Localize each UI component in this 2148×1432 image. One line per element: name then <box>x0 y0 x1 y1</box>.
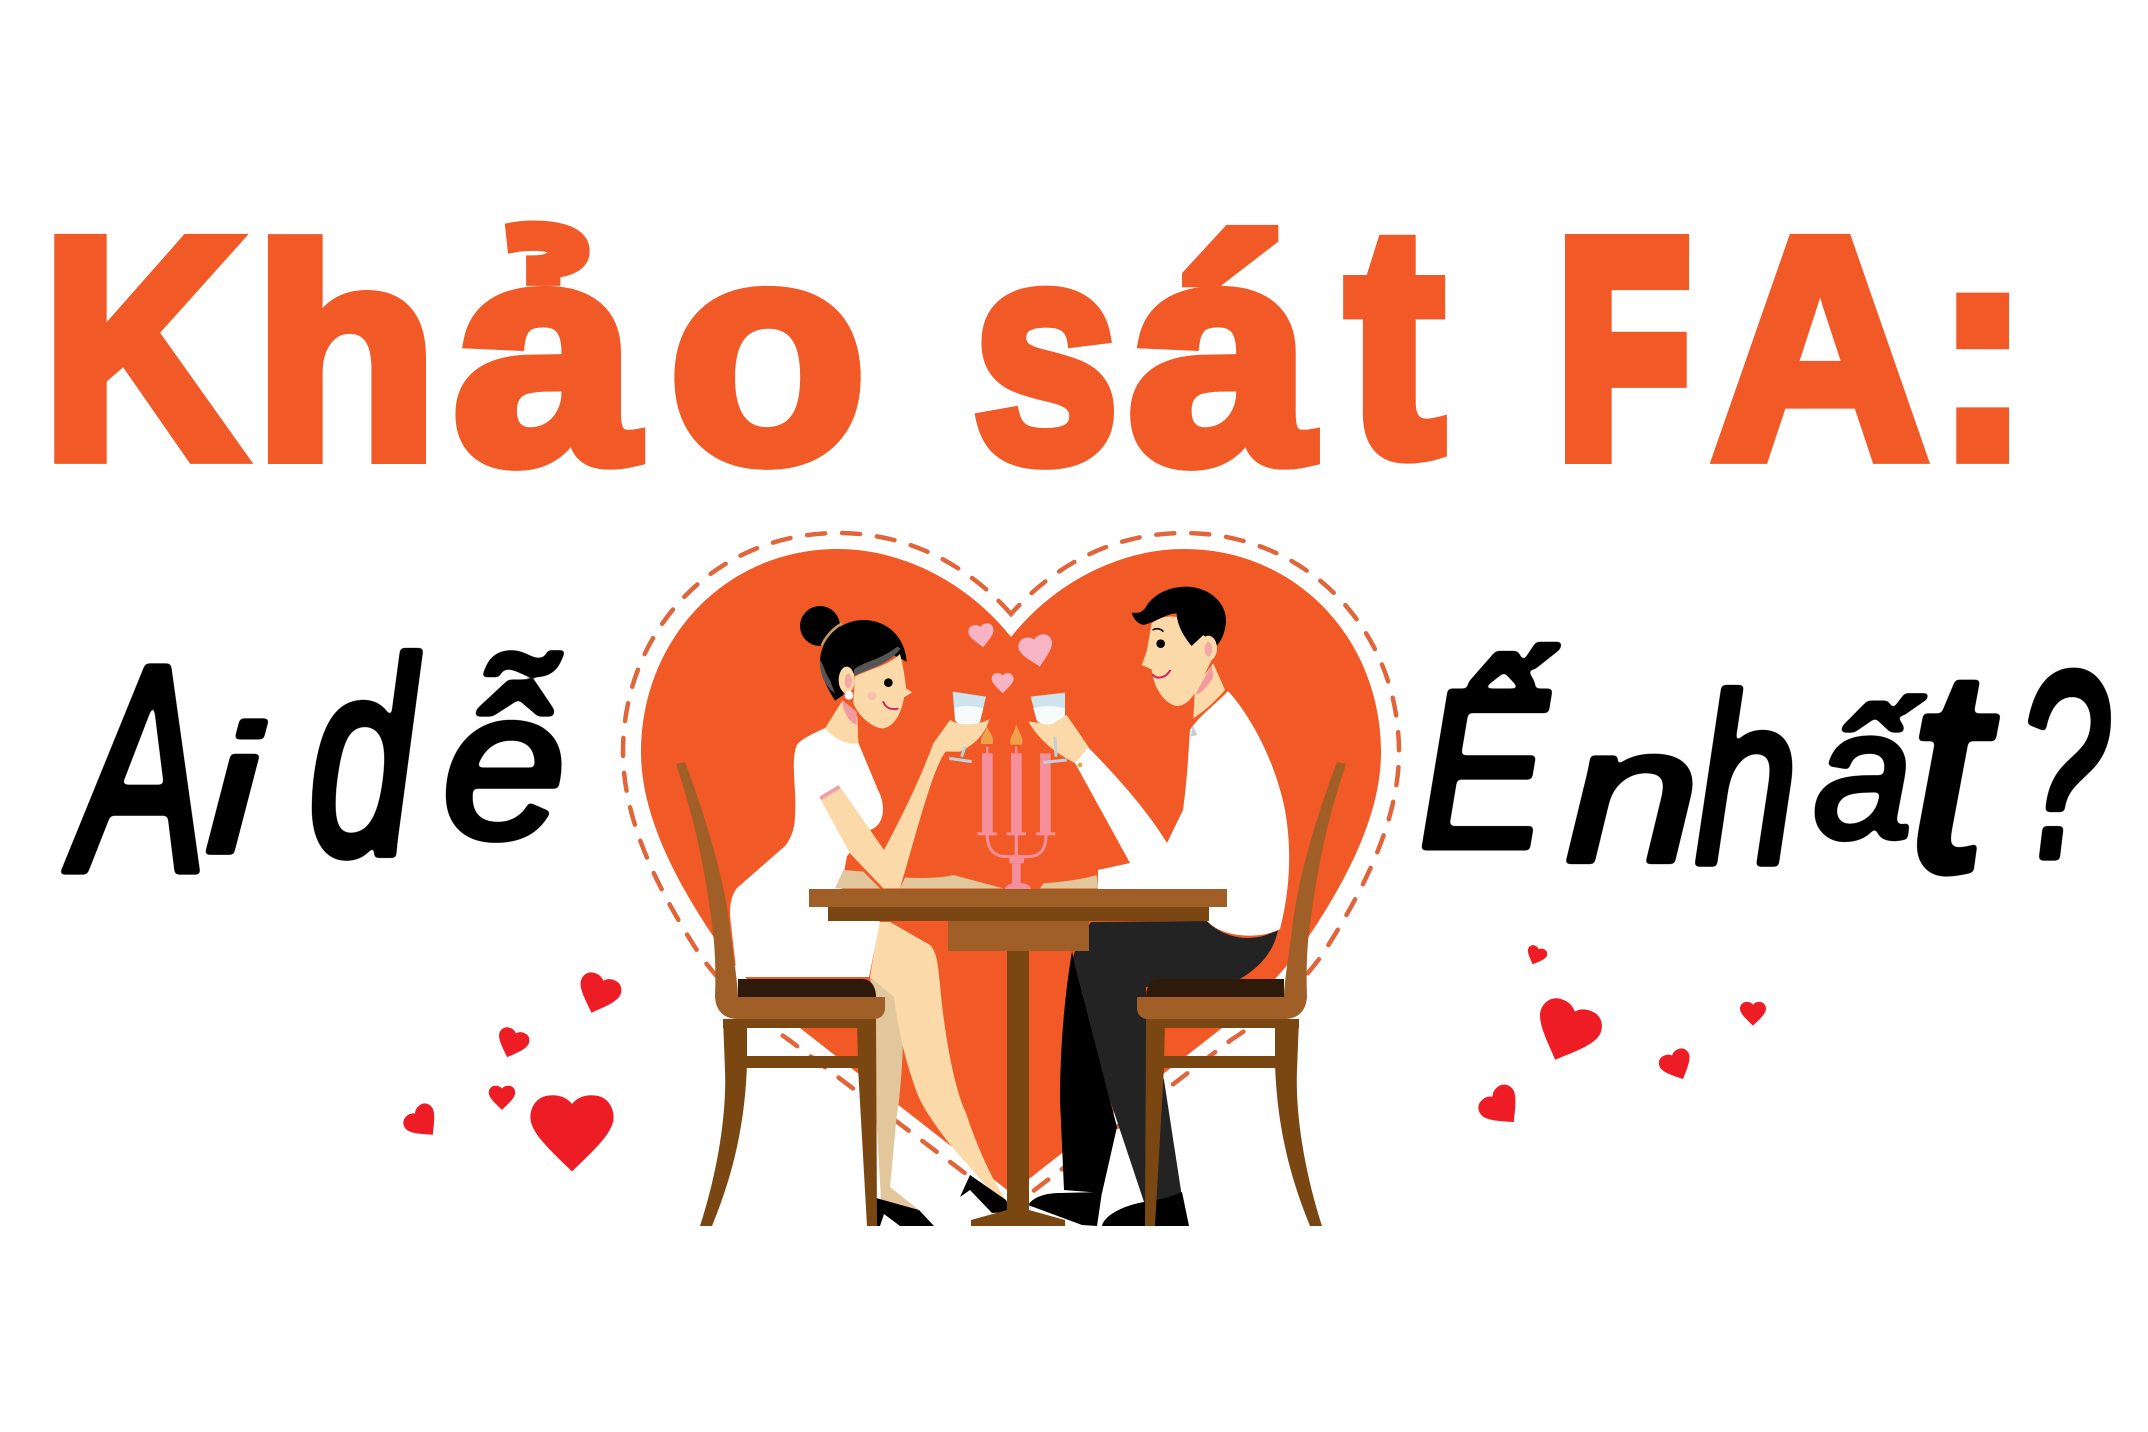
man shirt <box>1075 691 1289 936</box>
subtitle right: Ế nhất?: ? <box>2018 618 2109 912</box>
subtitle right: Ế nhất?: h <box>1695 646 1798 914</box>
title: Khảo sát FA: : <box>1935 174 2030 523</box>
dashed heart outline <box>623 533 1399 1208</box>
subtitle right: Ế nhất?: ấ <box>1814 671 1912 876</box>
title: Khảo sát FA: ả <box>453 178 636 527</box>
red hearts right group <box>1474 944 1766 1135</box>
subtitle left: Ai dễ: d <box>308 603 415 912</box>
subtitle left: Ai dễ: i <box>206 689 259 890</box>
title: Khảo sát FA: t <box>1346 159 1444 523</box>
woman dress <box>730 728 883 977</box>
red hearts left group <box>400 969 624 1171</box>
title: Khảo sát FA: K <box>42 172 243 524</box>
subtitle right: Ế nhất?: n <box>1566 686 1699 902</box>
candelabra <box>977 724 1067 889</box>
woman arm and tabletop forearms <box>819 743 1098 888</box>
title: Khảo sát FA: h <box>253 186 438 521</box>
woman legs <box>870 922 1010 1226</box>
subtitle right: Ế nhất?: t <box>1909 611 1986 930</box>
woman head and neck <box>800 606 912 744</box>
big orange heart <box>641 549 1381 1193</box>
title: Khảo sát FA: s <box>972 178 1119 526</box>
subtitle left: Ai dễ: A <box>75 605 207 932</box>
small pink hearts <box>967 623 1056 693</box>
table <box>809 889 1227 1226</box>
man trousers <box>1028 921 1278 1226</box>
title: Khảo sát FA: á <box>1129 178 1312 527</box>
subtitle left: Ai dễ: ễ <box>442 646 566 882</box>
right wine glass and hand <box>1028 693 1088 767</box>
title: Khảo sát FA: A <box>1712 172 1929 524</box>
subtitle left: Ai dễ <box>60 603 566 932</box>
title: Khảo sát FA: F <box>1559 180 1689 517</box>
subtitle right: Ế nhất? <box>1419 611 2112 930</box>
illustration: couple at dinner table inside heart <box>623 533 1399 1226</box>
subtitle right: Ế nhất?: Ế <box>1419 644 1547 895</box>
left wine glass and hand <box>933 692 989 762</box>
upper detail: heads, arms, glasses, candles <box>800 587 1226 889</box>
left chair <box>676 762 885 1226</box>
title: Khảo sát FA: o <box>669 178 866 526</box>
man head and neck <box>1132 587 1226 737</box>
right chair <box>1137 762 1346 1226</box>
title: Khảo sát FA <box>42 159 2030 527</box>
